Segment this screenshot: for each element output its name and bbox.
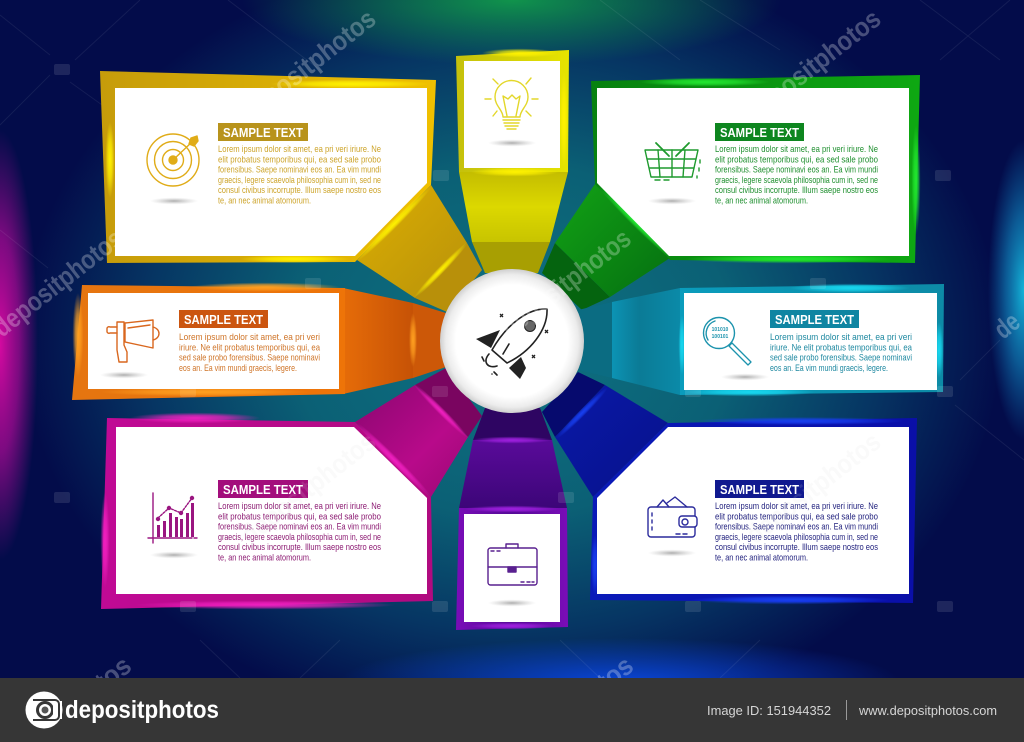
icon: briefcase [488,544,537,585]
panel: briefcase (purple) [456,408,568,630]
body text: Lorem ipsum dolor sit amet, ea pri veri iriure. Ne [218,501,381,512]
body text: te, an nec animal atomorum. [715,196,808,206]
watermarks: depositphotos [740,426,886,550]
body text: eos an. Ea vim mundi graecis, legere. [770,363,888,374]
panel: megaphone (orange) [72,282,446,400]
icon: megaphone [107,320,159,362]
body text: forensibus. Saepe nominavi eos an. Ea vim mundi [715,522,878,533]
icon shadow [488,140,536,146]
label badge: SAMPLE TEXT [184,312,263,327]
icon shadow [648,550,696,556]
body text: consul civibus incorrupte. Illum saepe nostro eos [715,542,878,553]
body text: consul civibus incorrupte. Illum saepe nostro eos [218,185,381,196]
icon: light bulb [485,78,538,129]
body text: iriure. Ne elit probatus temporibus qui, ea [770,342,913,353]
body text [218,501,381,564]
arm: cyan outer fold [612,288,680,395]
arm: purple inner fold [473,408,552,440]
body text: Lorem ipsum dolor sit amet, ea pri veri iriure. Ne [715,501,878,512]
body text: consul civibus incorrupte. Illum saepe nostro eos [715,185,878,196]
body text: eos an. Ea vim mundi graecis, legere. [179,363,297,374]
label badge: SAMPLE TEXT [720,482,799,497]
body text: Lorem ipsum dolor sit amet, ea pri veri [770,332,912,343]
body text: te, an nec animal atomorum. [715,552,808,564]
icon shadow [150,552,198,558]
arm: cyan inner fold [578,302,612,378]
icon shadow [721,374,769,380]
panel: idea (lime) [456,48,569,273]
body text: elit probatus temporibus qui, ea sed sale probo [715,511,878,522]
body text: forensibus. Saepe nominavi eos an. Ea vim mundi [218,522,381,533]
watermarks: tos [89,650,137,697]
body text: elit probatus temporibus qui, ea sed sale probo [218,511,381,522]
body text: graecis, legere scaevola philosophia cum in, sed ne [715,532,878,543]
white card [88,293,339,389]
white card [115,88,427,256]
arm: orange outer fold [343,288,413,394]
panel: basket (green) [542,75,920,310]
watermarks: depositphotos [495,223,637,343]
website: www.depositphotos.com [858,703,997,718]
footer bar [0,678,1024,742]
label badge: SAMPLE TEXT [720,125,799,140]
body text: Lorem ipsum dolor sit amet, ea pri veri [179,332,320,343]
arm: lime outer fold [459,172,568,242]
divider [846,700,847,720]
body text [218,144,381,206]
arm: yellow outer fold [357,185,467,298]
arm: blue outer fold [555,385,668,497]
body text [179,332,321,374]
arm: magenta outer fold [355,385,468,497]
arm: green outer fold [555,184,670,297]
frame: yellow [100,71,436,263]
center hub with rocket [440,269,584,413]
body text [770,332,913,374]
body text: te, an nec animal atomorum. [218,552,311,564]
label badge: SAMPLE TEXT [223,482,303,497]
icon shadow [648,198,696,204]
body text: iriure. Ne elit probatus temporibus qui, ea [179,342,321,353]
icon: bar chart [148,493,197,543]
frame: blue [590,418,917,603]
white card [116,427,427,594]
logo: camera badge [26,692,62,728]
frame: orange [72,285,345,400]
icon: magnifier: 101010 [712,327,729,333]
arm: green inner fold [542,243,610,310]
watermarks: depositphotos [235,426,381,550]
arm: yellow inner fold [415,243,482,312]
body text: Lorem ipsum dolor sit amet, ea pri veri iriure. Ne [218,144,381,155]
body text: sed sale probo forensibus. Saepe nominavi [179,353,320,364]
body text [715,144,878,206]
arm: magenta inner fold [415,368,482,437]
frame: magenta [101,418,433,609]
white card [597,88,909,256]
body text: elit probatus temporibus qui, ea sed sale probo [715,154,878,165]
label badge: SAMPLE TEXT [775,312,854,327]
icon: wallet [648,497,697,537]
icon shadow [150,198,198,204]
label badge: SAMPLE TEXT [223,125,303,140]
frame: cyan [680,284,944,395]
arm: blue inner fold [542,372,605,437]
body text: graecis, legere scaevola philosophia cum in, sed ne [218,175,381,186]
panel: goal (yellow) [100,71,482,312]
arm: orange inner fold [413,303,446,378]
hub disc [440,269,584,413]
icon: target [147,134,199,186]
body text: te, an nec animal atomorum. [218,196,311,206]
panel: search (cyan) [578,284,944,396]
watermarks: tos [591,650,639,697]
arm: purple outer fold [459,440,567,508]
body text: Lorem ipsum dolor sit amet, ea pri veri iriure. Ne [715,144,878,155]
body text: forensibus. Saepe nominavi eos an. Ea vim mundi [218,165,381,176]
frame: lime [456,50,569,172]
logo wordmark: depositphotos [65,696,219,724]
icon: magnifier [704,318,751,365]
icon: rocket [476,309,548,379]
panel: chart (magenta) [100,368,482,610]
image id: Image ID: 151944352 [707,703,831,718]
body text: graecis, legere scaevola philosophia cum in, sed ne [715,175,878,186]
white card [684,293,937,390]
icon: magnifier: 100101 [712,334,729,340]
white card [597,427,909,594]
body text: consul civibus incorrupte. Illum saepe nostro eos [218,542,381,553]
icon: shopping basket [645,143,700,180]
panel: wallet (blue) [542,372,917,604]
icon shadow [100,372,148,378]
arm: lime inner fold [472,242,550,273]
body text: elit probatus temporibus qui, ea sed sale probo [218,154,381,165]
frame: green [591,75,920,263]
frame: purple [456,508,568,630]
body text [715,501,878,564]
white card [464,514,560,622]
icon shadow [488,600,536,606]
body text: graecis, legere scaevola philosophia cum in, sed ne [218,532,381,543]
body text: forensibus. Saepe nominavi eos an. Ea vim mundi [715,165,878,176]
body text: sed sale probo forensibus. Saepe nominavi [770,353,912,364]
white card [464,61,560,168]
